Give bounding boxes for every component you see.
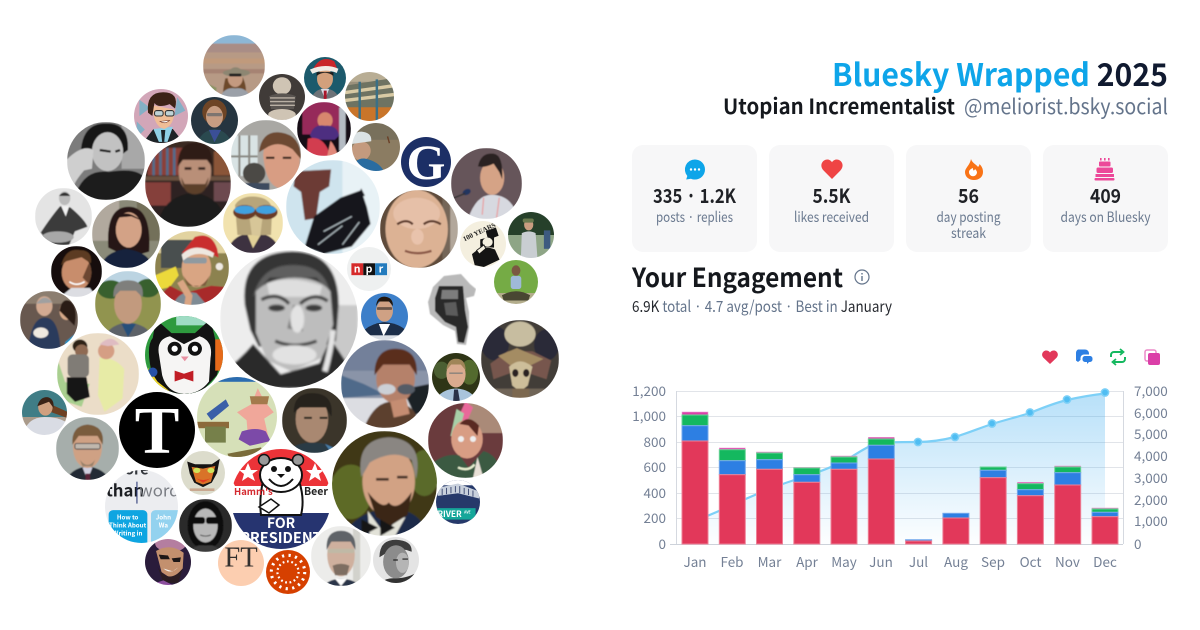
avatar: two babies on blanket (57, 333, 139, 415)
heading: your engagement: Your Engagement (631, 258, 843, 295)
label: day posting streak: streak (951, 223, 986, 243)
avatar: more than words screenshot: more (111, 458, 149, 479)
user handle: @meliorist.bsky.social (964, 91, 1168, 121)
month labels: Aug (944, 551, 968, 571)
left axis labels: 1,000 (632, 405, 666, 425)
user name: Utopian Incrementalist (723, 91, 955, 121)
avatar: large close-up face (380, 190, 458, 268)
avatar: The Guardian logo: G (407, 134, 445, 190)
avatar: bearded man in tuxedo (332, 431, 437, 536)
avatar: more than words screenshot: Wa (159, 521, 168, 530)
avatar: 100 years badge (460, 221, 506, 267)
avatar: person with cap in garden (508, 212, 554, 258)
avatar: man with glasses and suit (56, 417, 119, 480)
avatar: man with mohawk and feathers (428, 403, 503, 478)
avatar: more than words screenshot: than (106, 477, 144, 501)
right axis labels: 4,000 (1134, 445, 1168, 465)
month labels: Nov (1055, 551, 1080, 571)
avatar cluster (20, 35, 559, 594)
right axis labels: 7,000 (1134, 380, 1168, 400)
avatar: 100 years badge: 100 YEARS (462, 222, 497, 243)
right axis labels: 5,000 (1134, 423, 1168, 443)
right axis labels: 3,000 (1134, 467, 1168, 487)
month labels: Oct (1020, 551, 1041, 571)
right axis labels (1134, 380, 1168, 553)
value: likes received: 5.5K (812, 180, 851, 209)
legend: replies (1076, 350, 1092, 364)
month labels: Dec (1093, 551, 1117, 571)
avatar: more than words screenshot: John (156, 513, 171, 522)
icon: info (855, 270, 869, 284)
avatar: man with glasses and goatee (311, 526, 371, 586)
avatar: man in front of bookshelf (145, 141, 231, 227)
avatar: more than words screenshot: words (139, 477, 188, 501)
avatar: NPR logo: n (354, 262, 361, 277)
left axis labels: 0 (658, 533, 666, 553)
month labels: Sep (981, 551, 1005, 571)
month labels: Feb (720, 551, 744, 571)
avatar: NPR logo: p (366, 262, 373, 277)
engagement chart (632, 380, 1168, 571)
avatar: Hamm's bear for president: FOR (267, 513, 296, 533)
avatar: masked figure cutout (428, 274, 476, 346)
avatar: news anchor in suit (361, 293, 408, 340)
avatar: laughing man with beard (145, 539, 191, 585)
avatar: child in purple on red (297, 102, 351, 156)
avatar: black and white older man (373, 537, 419, 583)
left axis labels (632, 380, 666, 553)
avatar: Hamm's bear for president: Beer (304, 484, 328, 499)
avatar: Patrick Star cartoon (197, 377, 277, 457)
value: posts and replies: 335 · 1.2K (653, 180, 737, 209)
month labels: Apr (796, 551, 819, 571)
avatar: black and white woman (67, 122, 145, 200)
avatar: River Ave sign: AVE (463, 510, 471, 515)
label: likes received: likes received (794, 207, 869, 227)
label: days on Bluesky: days on Bluesky (1060, 207, 1151, 227)
avatar: skull sculpture (481, 320, 559, 398)
avatar: selfie man by window (231, 120, 301, 190)
avatar: woman in hat at canyon (203, 35, 265, 97)
avatar: smiling man in shadow (51, 246, 102, 297)
avatar: cartoon man with glasses (134, 89, 188, 143)
avatar: River Ave sign: RIVER (437, 508, 462, 520)
avatar: orange dotted ring logo (266, 550, 310, 594)
icon: flame (965, 159, 983, 180)
avatar: woman in white top (22, 390, 67, 435)
avatar: speaker with microphone (451, 148, 522, 219)
stat card: posts and replies (632, 145, 757, 252)
month labels (683, 551, 1117, 571)
avatar: NPR logo: r (379, 262, 384, 277)
avatar: more than words screenshot: Think About (109, 521, 147, 530)
avatar: man in white helmet in field (352, 123, 400, 171)
engagement summary: 6.9K total · 4.7 avg/post · Best in January (632, 295, 892, 317)
right axis labels: 1,000 (1134, 510, 1168, 530)
avatar: batman illustration (286, 160, 380, 254)
stat card: likes received (769, 145, 894, 252)
icon: heart (821, 160, 843, 179)
month labels: Jun (869, 551, 893, 571)
cumulative area (695, 394, 1105, 544)
avatar: man in Santa hat (304, 57, 346, 99)
stacked bars (682, 412, 1118, 544)
avatar: person in sunglasses black and white (179, 499, 232, 552)
cumulative line (695, 394, 1105, 521)
stat card: days on Bluesky (1043, 145, 1168, 252)
avatar: Hamm's bear for president (233, 449, 329, 549)
label: posts and replies: posts · replies (656, 207, 733, 227)
avatar: River Ave sign (436, 480, 480, 524)
avatar: woman with curly hair (191, 97, 238, 144)
chart legend icons (1042, 349, 1160, 365)
avatar: New York Times logo: T (135, 394, 179, 468)
month labels: May (831, 551, 857, 571)
avatar: NPR logo (347, 247, 391, 291)
legend: reposts (1111, 349, 1125, 365)
left axis labels: 400 (644, 482, 666, 502)
value: days on Bluesky: 409 (1090, 180, 1121, 209)
avatar: man with gray hair in field (95, 271, 161, 337)
avatar: Hamm's bear for president: Hamm's (234, 484, 273, 498)
value: day streak: 56 (958, 180, 979, 209)
avatar: New York Times logo (119, 392, 195, 468)
icon: chat bubble (685, 159, 705, 180)
avatar: building at dusk (345, 72, 394, 121)
right axis labels: 0 (1134, 533, 1142, 553)
avatar: cartoon cat with bow tie (145, 316, 223, 394)
avatar: tiger face illustration (181, 451, 225, 495)
legend: likes (1042, 350, 1058, 364)
avatar: black and white lithograph (35, 188, 92, 245)
avatar: woman with dark hair outdoors (92, 200, 160, 268)
legend: quotes (1145, 350, 1160, 365)
avatar: large man in leather helmet (220, 250, 358, 388)
left axis labels: 600 (644, 456, 666, 476)
label: day posting streak: day posting (936, 207, 1001, 227)
avatar: man with mirrored sunglasses (223, 193, 283, 253)
avatar: more than words screenshot: Writing in (113, 529, 142, 538)
title: Bluesky Wrapped 2025 (832, 50, 1168, 95)
month labels: Jul (909, 551, 928, 571)
avatar: man in Santa hat with bird (155, 231, 229, 305)
avatar: baby in striped sweater (259, 74, 305, 120)
avatar: Financial Times logo: FT (224, 543, 258, 574)
icon: birthday cake (1094, 158, 1114, 180)
left axis labels: 800 (644, 431, 666, 451)
cumulative line points (914, 389, 1109, 446)
avatar: Hamm's bear for president: PRESIDENT (240, 527, 322, 548)
chart gridlines (670, 391, 1124, 544)
right axis labels: 2,000 (1134, 489, 1168, 509)
month labels: Jan (683, 551, 707, 571)
avatar: man looking sideways dark background (282, 388, 347, 453)
left axis labels: 200 (644, 507, 666, 527)
avatar: woman sitting on grass (494, 260, 538, 304)
avatar: man in blue shirt and tie (432, 353, 480, 401)
right axis labels: 6,000 (1134, 402, 1168, 422)
avatar: man with aviators and mountains (341, 340, 429, 428)
avatar: more than words screenshot: How to (117, 513, 139, 522)
left axis labels: 1,200 (632, 380, 666, 400)
avatar: family at table (20, 291, 78, 349)
month labels: Mar (758, 551, 782, 571)
stat card: day posting streak (906, 145, 1031, 252)
avatar: more than words screenshot (105, 470, 178, 543)
avatar: Financial Times logo (218, 540, 264, 586)
